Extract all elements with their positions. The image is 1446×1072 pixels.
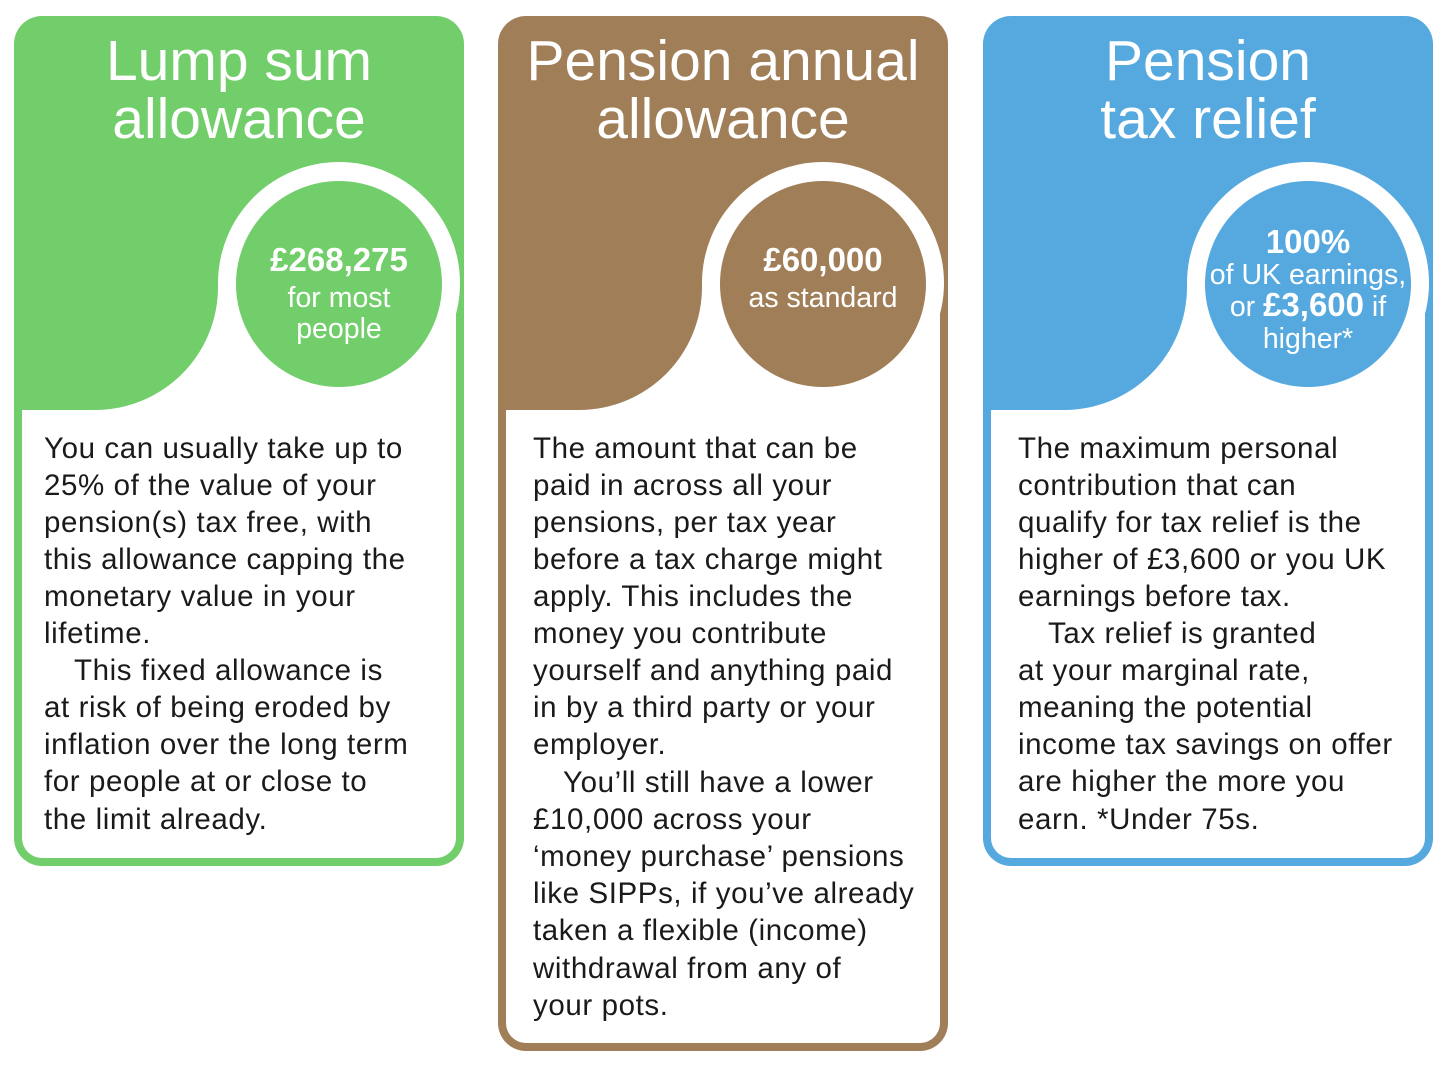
body text: annual allowance: withdrawal from any of (532, 952, 842, 985)
body text: lump sum: monetary value in your (44, 580, 356, 613)
circle: £60,000: as standard (749, 282, 897, 314)
body text: annual allowance: The amount that can be (533, 432, 858, 465)
body text: lump sum: 25% of the value of your (44, 469, 377, 502)
panel: pension annual allowance (498, 16, 948, 1051)
body text: annual allowance: money you contribute (533, 617, 827, 650)
body text: annual allowance: £10,000 across your (533, 803, 812, 836)
body text: annual allowance: apply. This includes the (533, 580, 853, 613)
body text: lump sum: this allowance capping the (44, 543, 406, 576)
body text: tax relief: income tax savings on offer (1018, 728, 1393, 761)
body text: tax relief: Tax relief is granted (1048, 617, 1316, 650)
body text: tax relief: contribution that can (1018, 469, 1296, 502)
circle: £60,000 (720, 181, 926, 387)
body text: lump sum: You can usually take up to (44, 432, 403, 465)
body text: lump sum: the limit already. (44, 803, 267, 836)
heading: lump sum allowance: Lump sum (106, 29, 372, 93)
body text: tax relief: qualify for tax relief is the (1018, 506, 1362, 539)
body text: tax relief: earnings before tax. (1018, 580, 1291, 613)
circle: 100%: of UK earnings, (1210, 259, 1406, 291)
body text: lump sum: inflation over the long term (44, 728, 408, 761)
body text: annual allowance: in by a third party or your (533, 691, 876, 724)
body text: tax relief: higher of £3,600 or you UK (1018, 543, 1386, 576)
body text: annual allowance: before a tax charge might (533, 543, 883, 576)
body text: tax relief: earn. *Under 75s. (1018, 803, 1259, 836)
body text: tax relief: are higher the more you (1018, 765, 1345, 798)
body text: annual allowance: pensions, per tax year (533, 506, 836, 539)
body text: tax relief: The maximum personal (1018, 432, 1338, 465)
body text: annual allowance: employer. (533, 728, 666, 761)
heading: pension annual allowance: allowance (596, 87, 850, 151)
body text: lump sum: pension(s) tax free, with (44, 506, 372, 539)
body text: annual allowance: taken a flexible (income) (533, 914, 868, 947)
circle: £268,275: £268,275 (270, 241, 408, 278)
circle: £60,000: £60,000 (763, 241, 883, 278)
body text: lump sum: for people at or close to (44, 765, 367, 798)
circle: £268,275: for most (288, 282, 391, 314)
body text: annual allowance: ‘money purchase’ pensions (533, 840, 904, 873)
circle: 100%: or £3,600 if (1230, 286, 1386, 323)
body text: lump sum: lifetime. (44, 617, 151, 650)
circle: £268,275: people (296, 313, 382, 345)
body text: tax relief: meaning the potential (1018, 691, 1313, 724)
body text: annual allowance: your pots. (533, 989, 669, 1022)
body text: annual allowance: like SIPPs, if you’ve already (533, 877, 914, 910)
circle: £268,275 (236, 181, 442, 387)
heading: pension tax relief: tax relief (1100, 87, 1316, 151)
body text: tax relief: at your marginal rate, (1018, 654, 1310, 687)
circle: 100% (1205, 181, 1411, 387)
panel: lump sum allowance (14, 16, 464, 866)
heading: lump sum allowance: allowance (112, 87, 366, 151)
circle: 100%: higher* (1263, 323, 1353, 355)
body text: annual allowance: yourself and anything paid (533, 654, 893, 687)
heading: pension tax relief: Pension (1105, 29, 1311, 93)
panel: pension tax relief (983, 16, 1433, 866)
body text: lump sum: at risk of being eroded by (44, 691, 391, 724)
body text: annual allowance: You’ll still have a lower (563, 766, 874, 799)
body text: lump sum: This fixed allowance is (74, 654, 383, 687)
body text: annual allowance: paid in across all your (533, 469, 832, 502)
circle: 100%: 100% (1266, 223, 1350, 260)
heading: pension annual allowance: Pension annual (526, 29, 920, 93)
